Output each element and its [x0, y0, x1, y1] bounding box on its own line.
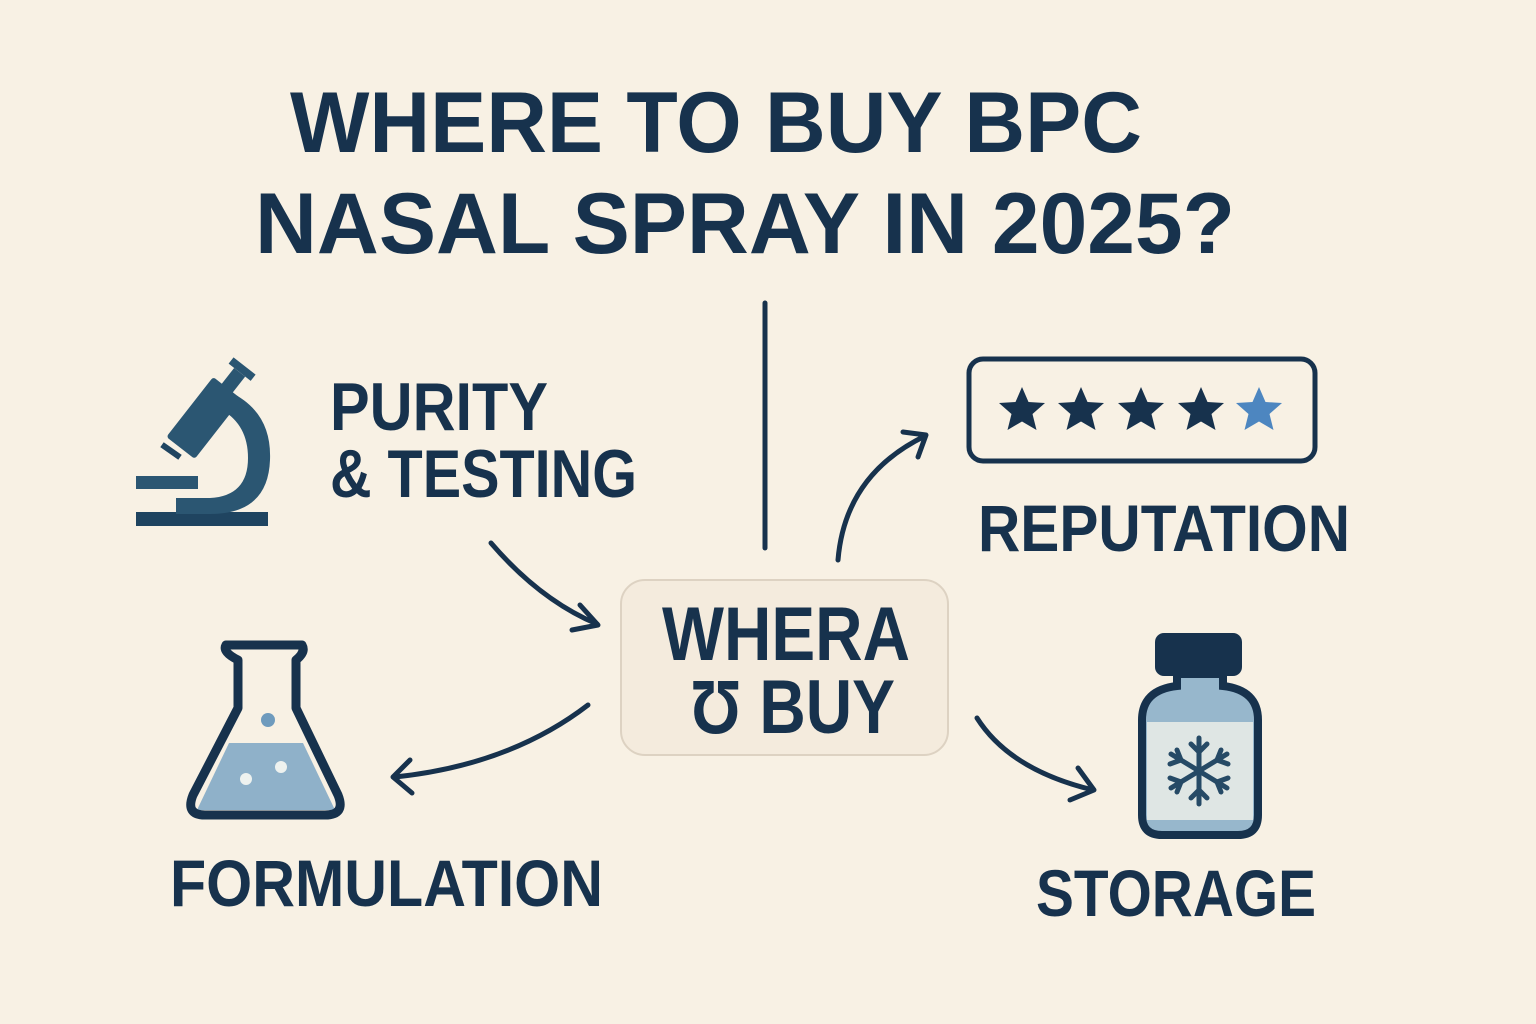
title — [255, 75, 1235, 272]
heading: purity & testing: & TESTING — [330, 436, 637, 512]
panel: reputation stars — [969, 359, 1315, 461]
center box: where to buy: Ʊ BUY — [690, 665, 895, 750]
icon: microscope — [136, 355, 270, 526]
heading: formulation: FORMULATION — [170, 846, 603, 920]
center box: where to buy — [621, 580, 948, 755]
heading: storage: STORAGE — [1036, 856, 1316, 930]
arrows — [393, 432, 1094, 800]
title: WHERE TO BUY BPC — [290, 75, 1142, 171]
icon: bottle with snowflake — [1142, 633, 1258, 835]
heading: reputation: REPUTATION — [978, 491, 1350, 565]
title: NASAL SPRAY IN 2025? — [255, 176, 1235, 272]
icon: flask — [191, 645, 340, 815]
center box: where to buy: WHERA — [662, 592, 910, 677]
heading: purity & testing: PURITY — [330, 369, 548, 445]
heading: purity & testing — [330, 369, 637, 512]
vertical divider line — [762, 303, 768, 548]
